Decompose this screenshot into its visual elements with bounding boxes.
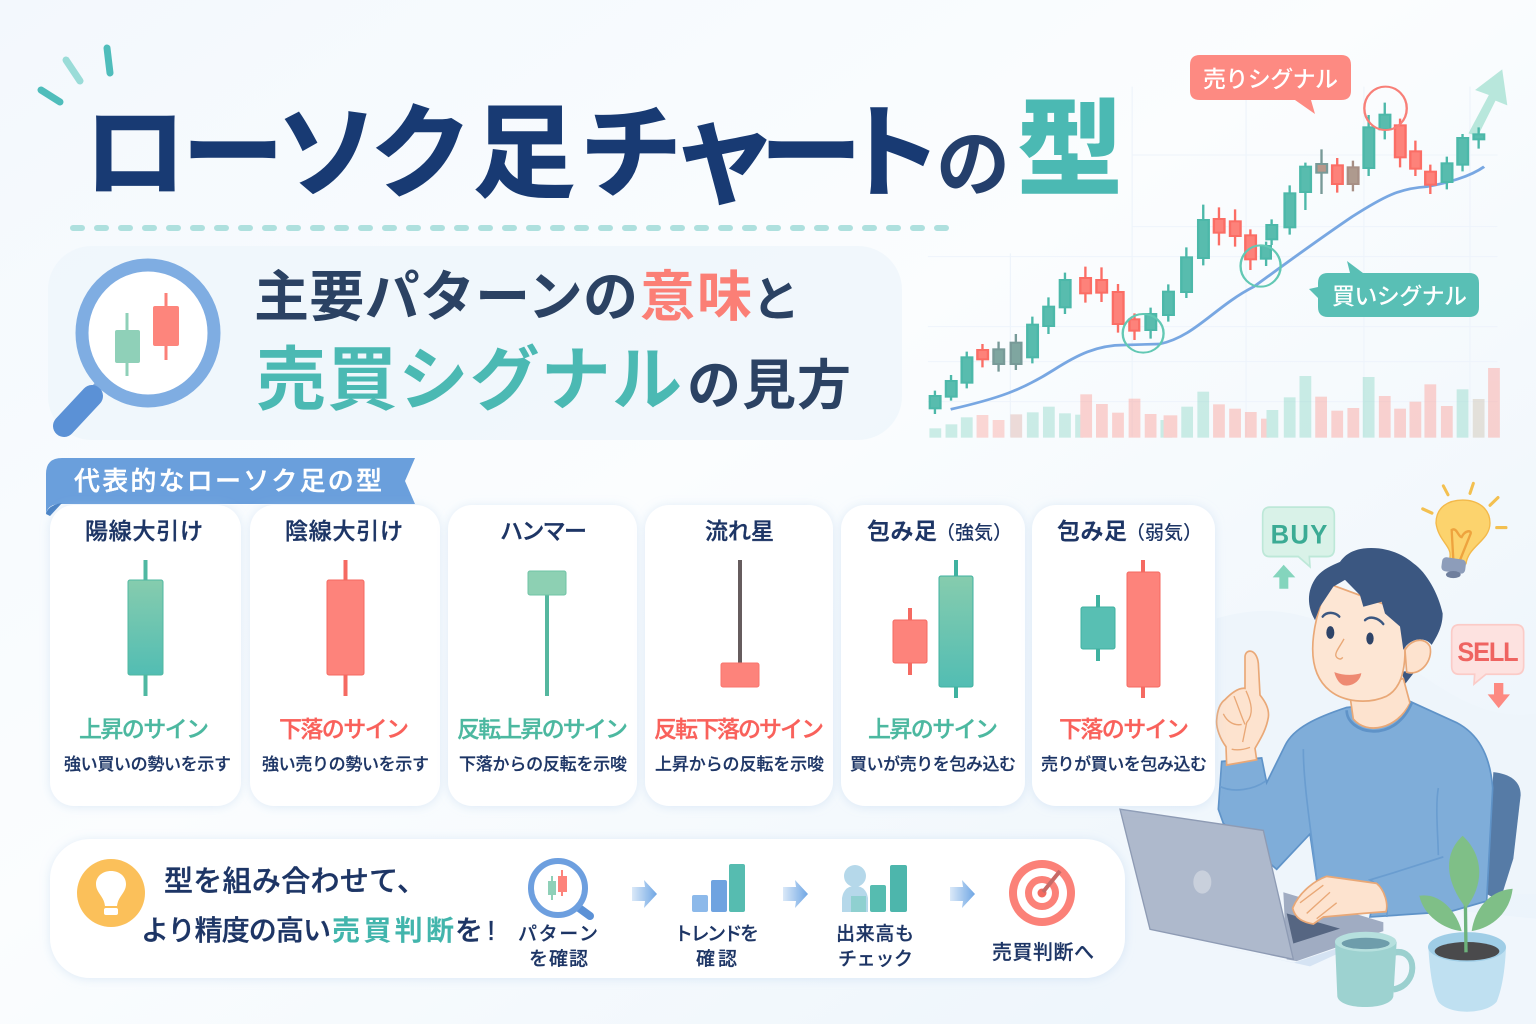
BUY bubble: BUY	[1271, 519, 1328, 550]
panel: card 4: 上昇からの反転を示唆	[655, 755, 824, 774]
panel: card 5: （強気）	[936, 522, 1012, 544]
moving average line	[951, 167, 1484, 409]
panel: card 6: （弱気）	[1126, 522, 1202, 544]
title: ャ	[669, 94, 779, 217]
decorative sparks	[41, 48, 110, 102]
step 2: check trend	[674, 864, 759, 970]
panel: card 1	[50, 505, 241, 806]
SELL bubble	[1452, 625, 1524, 708]
soft hills	[1217, 611, 1536, 894]
chart: candlesticks with moving average and volume	[928, 69, 1507, 438]
panel: card 5: 上昇のサイン	[868, 716, 998, 742]
plant pot	[1419, 836, 1513, 1012]
panel: card 1: 強い買いの勢いを示す	[64, 755, 231, 774]
panel: card 3: 下落からの反転を示唆	[459, 755, 627, 774]
mug	[1335, 932, 1412, 1007]
SELL bubble: SELL	[1457, 636, 1519, 667]
panel: card 4: 流れ星	[705, 518, 774, 544]
dashed divider	[73, 225, 948, 231]
panel: card 3	[448, 505, 637, 806]
callout: buy signal: 買いシグナル	[1332, 283, 1467, 309]
title: ク	[370, 97, 472, 211]
candle: shooting star	[721, 560, 759, 687]
step 1: check pattern	[518, 861, 598, 970]
signal circles	[1123, 87, 1407, 353]
candles	[930, 103, 1484, 414]
back hair at neck	[1402, 671, 1415, 684]
panel: card 2: 下落のサイン	[279, 716, 409, 742]
title	[84, 92, 1123, 217]
step 1: check pattern: を確認	[529, 948, 588, 970]
title: 型	[1017, 92, 1123, 210]
title: ソ	[276, 97, 378, 211]
step 2: check trend: トレンドを	[674, 924, 759, 945]
title: ー	[182, 97, 284, 211]
panel: bottom summary	[50, 839, 1125, 978]
panel: card 2: 陰線大引け	[285, 518, 403, 544]
hair	[1309, 548, 1443, 650]
section tab	[46, 458, 415, 516]
subtitle line 1: と	[752, 274, 800, 327]
panel: bottom summary: を!	[455, 915, 495, 946]
summary text: 型を組み合わせて、	[164, 865, 426, 898]
BUY bubble	[1263, 507, 1334, 589]
desk	[1110, 890, 1536, 1024]
arrow	[632, 880, 657, 908]
step 4: target	[992, 860, 1094, 964]
face	[1313, 583, 1405, 701]
panel: card 4: 反転下落のサイン	[654, 716, 824, 742]
title: チ	[580, 97, 682, 211]
title: 足	[473, 97, 575, 211]
panel: card 5	[841, 505, 1025, 806]
panel: card 6: 下落のサイン	[1059, 716, 1189, 742]
chair	[1487, 772, 1521, 901]
callout: sell signal	[1190, 55, 1351, 114]
ear	[1405, 640, 1431, 673]
step 2: check trend: 確認	[696, 948, 737, 970]
panel: card 3: ハンマー	[500, 518, 587, 544]
candles: bearish engulfing	[1081, 560, 1160, 698]
icon: idea bulb	[77, 859, 145, 927]
panel: card 1: 上昇のサイン	[79, 716, 209, 742]
callout: buy signal	[1309, 261, 1479, 317]
neck	[1350, 678, 1410, 728]
panel: card 2	[250, 505, 440, 806]
step 4: target: 売買判断へ	[992, 941, 1094, 964]
panel: subtitle	[48, 246, 902, 440]
panel: card 2: 強い売りの勢いを示す	[262, 755, 429, 774]
candle: bearish long	[327, 560, 364, 696]
person illustration and desk	[1110, 483, 1536, 1024]
step 3: check volume: チェック	[838, 948, 913, 970]
step 3: check volume	[836, 865, 914, 970]
volume bars	[929, 368, 1500, 438]
callout: sell signal: 売りシグナル	[1203, 66, 1338, 92]
arrow	[950, 880, 975, 908]
panel: card 3: 反転上昇のサイン	[457, 716, 628, 742]
subtitle line 1: 意味	[640, 266, 752, 328]
subtitle line 2: 売買シグナル	[256, 341, 682, 419]
panel: card 6: 売りが買いを包み込む	[1041, 754, 1207, 774]
title: ー	[760, 97, 862, 211]
subtitle line 2: の見方	[687, 356, 851, 416]
panel: card 1: 陽線大引け	[85, 518, 203, 544]
trend arrow	[1468, 69, 1507, 136]
laptop	[1120, 809, 1383, 966]
sweater	[1218, 701, 1493, 917]
eyes and brows	[1323, 613, 1383, 659]
step 1: check pattern: パターン	[518, 923, 598, 945]
arrow	[783, 880, 808, 908]
panel: bottom summary: 売買判断	[332, 915, 454, 946]
icon: magnifier with candles	[64, 265, 214, 426]
candles: bullish engulfing	[893, 560, 973, 698]
mouth	[1334, 672, 1361, 686]
panel: bottom summary: より精度の高い	[141, 915, 331, 946]
title: の	[936, 123, 1010, 206]
hand on keyboard	[1293, 876, 1387, 924]
section tab: 代表的なローソク足の型	[74, 466, 382, 496]
subtitle line 1: 主要パターンの	[254, 266, 638, 328]
title: ト	[840, 97, 942, 211]
panel: card 6: 包み足	[1057, 518, 1127, 544]
step 3: check volume: 出来高も	[836, 923, 914, 945]
panel: card 6	[1032, 505, 1215, 806]
light bulb	[1423, 483, 1506, 578]
panel: card 4	[645, 505, 833, 806]
candle: bullish long	[128, 560, 163, 696]
pointing hand	[1217, 651, 1269, 765]
panel: card 5: 買いが売りを包み込む	[850, 754, 1016, 774]
title: ロ	[84, 97, 186, 211]
candle: hammer	[528, 571, 566, 696]
panel: card 5: 包み足	[867, 518, 937, 544]
